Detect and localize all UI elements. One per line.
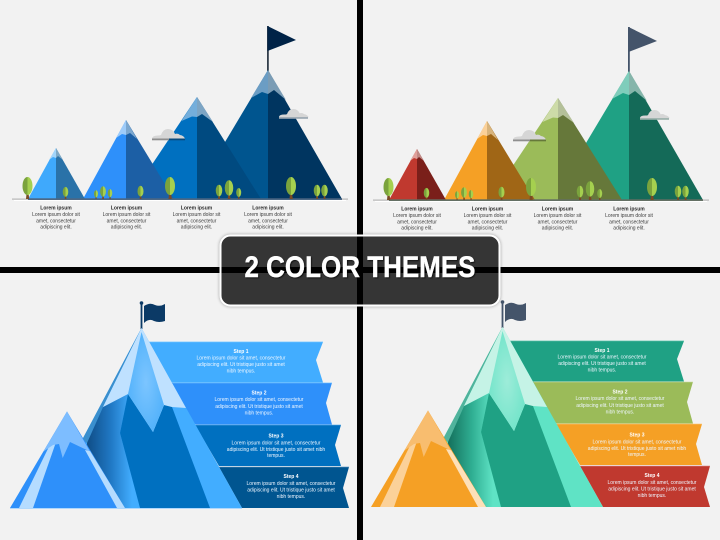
caption 2: Lorem ipsum (472, 206, 504, 212)
caption 1 (32, 206, 81, 230)
caption 1: Lorem ipsum (40, 206, 72, 212)
small mountain (371, 410, 486, 507)
caption 2: amet, consectetur (468, 219, 508, 225)
banner (220, 236, 500, 306)
caption 1: Lorem ipsum (401, 206, 433, 212)
caption 3: Lorem ipsum (181, 206, 213, 212)
caption 3: Lorem ipsum dolor sit (173, 212, 221, 218)
caption 1: amet, consectetur (36, 218, 76, 224)
caption 3: adipiscing elit. (181, 224, 212, 230)
caption 4: Lorem ipsum dolor sit (605, 213, 654, 219)
panel: multicolor mountain range (373, 27, 709, 231)
caption 3 (173, 206, 221, 230)
flag (628, 27, 657, 72)
ribbon step 2: adipiscing elit. Ut tristique justo sit amet (215, 404, 303, 410)
mountain 1 (28, 148, 85, 199)
caption 4: Lorem ipsum (252, 206, 284, 212)
ribbon step 1: adipiscing elit. Ut tristique justo sit amet (197, 362, 285, 368)
ribbon step 2: adipiscing elit. Ut tristique justo sit amet (576, 403, 664, 409)
cloud (152, 129, 185, 140)
ribbon step 2: nibh tempus. (606, 409, 634, 415)
ribbon step 2: Lorem ipsum dolor sit amet, consectetur (576, 396, 665, 402)
ribbon step 3 (195, 424, 341, 466)
panel: blue summit with steps (10, 301, 349, 509)
mountain 3 (129, 97, 261, 199)
ribbon step 4: adipiscing elit. Ut tristique justo sit amet (608, 487, 696, 493)
caption 3: amet, consectetur (538, 219, 578, 225)
ribbon step 3: Lorem ipsum dolor sit amet, consectetur (593, 439, 682, 445)
trees (384, 178, 689, 200)
ribbon step 3: Step 3 (268, 434, 284, 440)
ribbon step 1: Lorem ipsum dolor sit amet, consectetur (558, 355, 647, 361)
panel: multicolor summit with steps (371, 300, 710, 507)
flag (140, 301, 165, 329)
caption 4: Lorem ipsum dolor sit (244, 212, 293, 218)
cloud (640, 110, 670, 120)
caption 1: Lorem ipsum dolor sit (393, 213, 442, 219)
flag (267, 26, 296, 71)
mountain 3 (490, 98, 622, 200)
panel: blue mountain range (12, 26, 348, 230)
ribbon step 2 (532, 382, 693, 424)
ribbon step 1: Lorem ipsum dolor sit amet, consectetur (197, 356, 286, 362)
banner title: 2 COLOR THEMES (244, 251, 476, 284)
caption 2 (464, 206, 512, 231)
caption 4 (244, 206, 293, 230)
mountain 2 (444, 121, 535, 200)
ribbon step 4: Step 4 (283, 474, 299, 480)
caption 4: amet, consectetur (248, 218, 288, 224)
ribbon step 4: nibh tempus. (277, 494, 305, 500)
caption 4 (605, 206, 654, 231)
ribbon step 4: Lorem ipsum dolor sit amet, consectetur (247, 481, 336, 487)
ribbon step 3: tempus. (628, 452, 646, 458)
caption 4: adipiscing elit. (613, 225, 645, 231)
ribbon step 4: Step 4 (644, 473, 660, 479)
caption 4: Lorem ipsum (613, 206, 645, 212)
ribbon step 1: adipiscing elit. Ut tristique justo sit amet (558, 361, 646, 367)
ground line (373, 199, 709, 202)
caption 3: Lorem ipsum dolor sit (534, 213, 582, 219)
mountain 4 (552, 71, 703, 200)
ribbon step 3 (556, 424, 702, 465)
ribbon step 3: tempus. (267, 453, 285, 459)
mountain 2 (83, 120, 174, 199)
caption 3: Lorem ipsum (542, 206, 574, 212)
ribbon step 1 (510, 340, 684, 382)
caption 1: adipiscing elit. (401, 225, 433, 231)
ribbon step 4: Lorem ipsum dolor sit amet, consectetur (608, 480, 697, 486)
ribbon step 2: Step 2 (251, 391, 267, 397)
caption 1 (393, 206, 442, 231)
caption 2: adipiscing elit. (472, 225, 503, 231)
ribbon step 2: Step 2 (612, 390, 628, 396)
caption 2: adipiscing elit. (111, 224, 142, 230)
caption 4: adipiscing elit. (252, 224, 284, 230)
ribbon step 1: Step 1 (233, 349, 249, 355)
mountain 1 (389, 149, 446, 200)
mountain 4 (191, 70, 342, 199)
caption 1: adipiscing elit. (40, 224, 72, 230)
ground line (12, 198, 348, 201)
large mountain (443, 327, 603, 507)
ribbon step 1: Step 1 (594, 348, 610, 354)
ribbon step 1: nibh tempus. (227, 368, 255, 374)
caption 3: amet, consectetur (177, 218, 217, 224)
caption 2: Lorem ipsum (111, 206, 143, 212)
small mountain (10, 412, 125, 508)
trees (22, 177, 328, 199)
caption 1: amet, consectetur (397, 219, 437, 225)
ribbon step 3: adipiscing elit. Ut tristique justo sit amet nibh (588, 446, 686, 452)
caption 2: Lorem ipsum dolor sit (464, 213, 512, 219)
ribbon step 1 (149, 342, 323, 382)
ribbon step 2: nibh tempus. (245, 410, 273, 416)
caption 2: amet, consectetur (107, 218, 147, 224)
cloud (513, 130, 546, 141)
ribbon step 4: adipiscing elit. Ut tristique justo sit amet (247, 488, 335, 494)
ribbon step 3: adipiscing elit. Ut tristique justo sit amet nibh (227, 447, 325, 453)
cloud (279, 109, 309, 119)
ribbon step 4 (219, 466, 349, 508)
caption 3 (534, 206, 582, 231)
ribbon step 1: nibh tempus. (588, 367, 616, 373)
ribbon step 4 (580, 466, 710, 507)
ribbon step 3: Step 3 (629, 432, 645, 438)
ribbon step 4: nibh tempus. (638, 493, 666, 499)
large mountain (82, 328, 242, 508)
ribbon step 2 (171, 382, 332, 424)
caption 3: adipiscing elit. (542, 225, 573, 231)
caption 2 (103, 206, 151, 230)
ribbon step 2: Lorem ipsum dolor sit amet, consectetur (215, 397, 304, 403)
caption 4: amet, consectetur (609, 219, 649, 225)
flag (501, 300, 526, 328)
base line (10, 507, 242, 510)
caption 2: Lorem ipsum dolor sit (103, 212, 151, 218)
ribbon step 3: Lorem ipsum dolor sit amet, consectetur (232, 440, 321, 446)
caption 1: Lorem ipsum dolor sit (32, 212, 81, 218)
